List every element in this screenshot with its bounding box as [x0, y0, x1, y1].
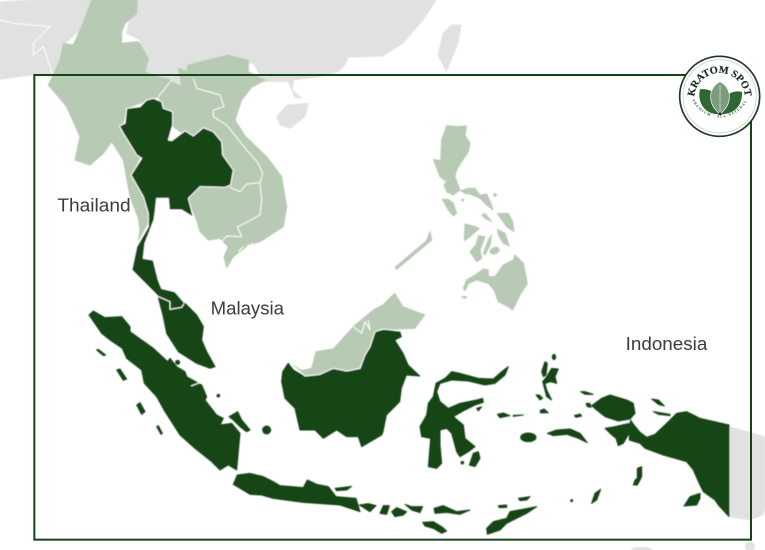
- Sumatra and nearby islands: [89, 311, 271, 470]
- Sulawesi and nearby islands: [420, 367, 536, 468]
- Thailand: [119, 98, 233, 309]
- logo wordmark: KRATOM SPOT: [687, 66, 752, 97]
- Myanmar: [48, 0, 172, 240]
- Peninsular Malaysia: [158, 297, 215, 368]
- Maluku and New Guinea: [536, 354, 729, 517]
- label: Thailand: Thailand: [57, 196, 131, 216]
- map frame: [34, 75, 751, 540]
- Philippines: [395, 126, 527, 310]
- label: Malaysia: Malaysia: [211, 298, 285, 318]
- Java and Lesser Sunda Islands: [233, 473, 537, 534]
- logo: Kratom Spot badge: [678, 56, 760, 138]
- Laos, Vietnam and Cambodia: [158, 55, 287, 268]
- logo tagline: PREMIUM · ALL NATURAL: [692, 99, 746, 118]
- icon: three leaves: [699, 82, 742, 115]
- label: Indonesia: Indonesia: [626, 334, 708, 354]
- Borneo: [282, 293, 425, 447]
